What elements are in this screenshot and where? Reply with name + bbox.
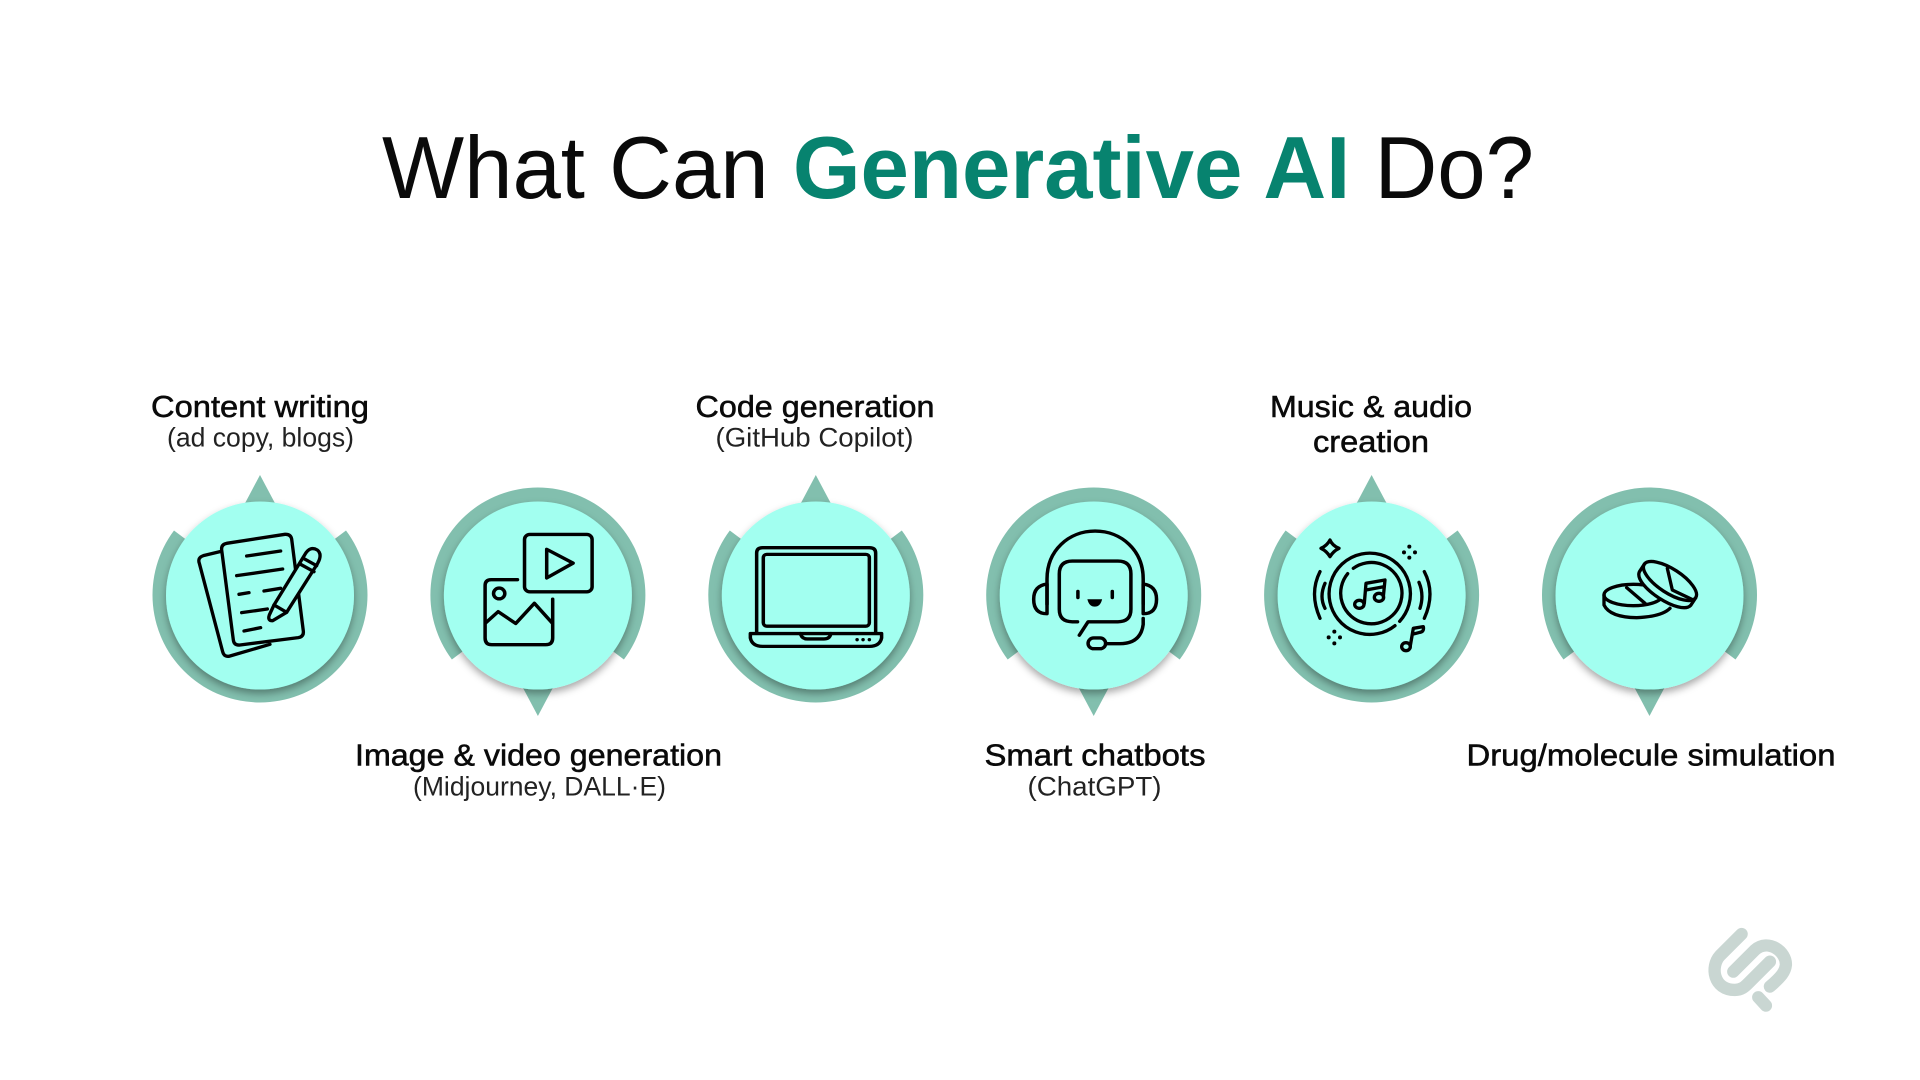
ring and pointer <box>708 475 923 702</box>
item: drug and molecule simulation <box>1466 488 1836 772</box>
icon: image and video <box>485 534 592 645</box>
label: music and audio creation: creation <box>1313 424 1429 459</box>
icon: documents and pencil <box>199 534 320 656</box>
disc <box>1000 502 1188 690</box>
label: smart chatbots: Smart chatbots <box>984 738 1206 772</box>
disc <box>166 502 354 690</box>
label: smart chatbots <box>984 738 1206 802</box>
ring and pointer <box>1542 488 1757 716</box>
disc <box>444 502 632 690</box>
disc <box>722 502 910 690</box>
disc <box>1556 502 1744 690</box>
label: image and video generation <box>355 738 722 802</box>
item: music and audio creation <box>1264 389 1479 702</box>
ring and pointer <box>152 475 368 702</box>
label: drug and molecule simulation: Drug/molecule simulation <box>1466 738 1836 772</box>
ring and pointer <box>1264 475 1479 702</box>
item: smart chatbots <box>984 488 1206 802</box>
ring and pointer <box>986 488 1201 716</box>
label: content writing: (ad copy, blogs) <box>167 422 354 452</box>
label: music and audio creation <box>1270 389 1472 459</box>
label: code generation <box>696 389 934 452</box>
icon: chatbot headset <box>1034 531 1157 649</box>
label: smart chatbots: (ChatGPT) <box>1028 772 1162 802</box>
disc <box>1278 502 1466 690</box>
title: What Can Generative AI Do? <box>382 118 1534 217</box>
item: content writing <box>151 389 369 702</box>
label: code generation: (GitHub Copilot) <box>716 422 914 452</box>
icon: laptop <box>750 548 882 646</box>
icon: music disc <box>1314 540 1430 651</box>
label: content writing: Content writing <box>151 389 369 424</box>
logo <box>1715 934 1786 1006</box>
label: image and video generation: Image & video generation <box>355 738 722 772</box>
label: code generation: Code generation <box>696 389 934 424</box>
ring and pointer <box>430 488 645 716</box>
item: image and video generation <box>355 488 722 802</box>
icon: pills <box>1604 554 1702 618</box>
label: music and audio creation: Music & audio <box>1270 389 1472 424</box>
label: content writing <box>151 389 369 452</box>
label: image and video generation: (Midjourney, DALL·E) <box>413 772 666 802</box>
item: code generation <box>696 389 934 702</box>
